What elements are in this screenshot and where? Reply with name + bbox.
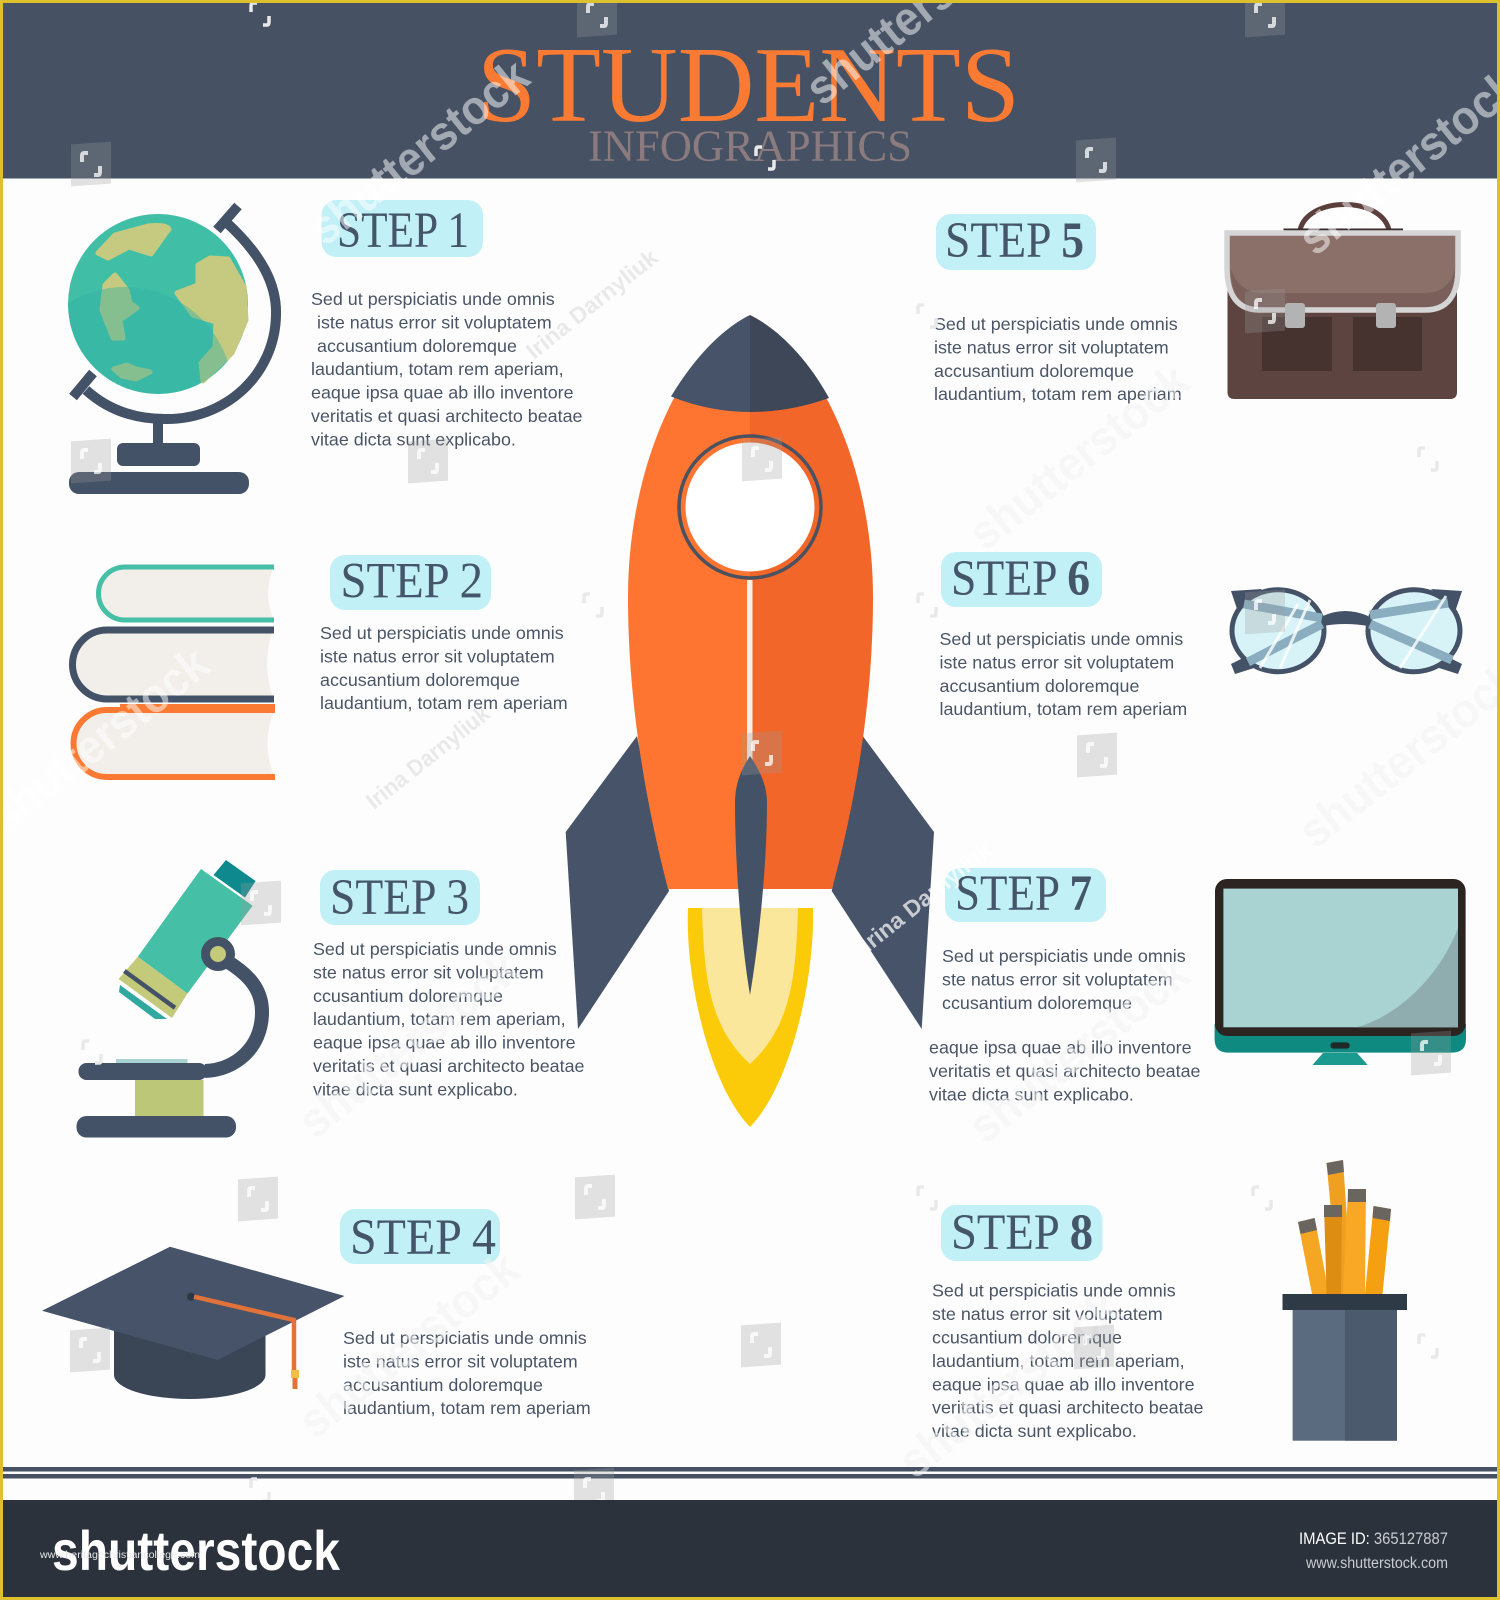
step 3 text: laudantium, totam rem aperiam, bbox=[313, 1009, 566, 1029]
title: INFOGRAPHICS bbox=[588, 122, 912, 170]
step 7 text: eaque ipsa quae ab illo inventore bbox=[929, 1038, 1192, 1058]
step 8 text: ste natus error sit voluptatem bbox=[932, 1304, 1163, 1324]
step 7 text: vitae dicta sunt explicabo. bbox=[929, 1084, 1134, 1104]
step 3 text: veritatis et quasi architecto beatae bbox=[313, 1056, 585, 1076]
footer image id: www.shutterstock.com bbox=[1305, 1555, 1448, 1572]
step 1 badge: STEP 1 bbox=[337, 203, 469, 259]
step 8 text: Sed ut perspiciatis unde omnis bbox=[932, 1281, 1176, 1301]
step 7 text: ste natus error sit voluptatem bbox=[942, 969, 1173, 989]
step 1 text: eaque ipsa quae ab illo inventore bbox=[311, 383, 574, 403]
icon: monitor bbox=[1215, 879, 1466, 1065]
footer image id: IMAGE ID: 365127887 bbox=[1299, 1529, 1448, 1548]
icon: briefcase bbox=[1227, 204, 1458, 399]
step 7 badge: STEP 7 bbox=[955, 866, 1092, 922]
step 4 text: laudantium, totam rem aperiam bbox=[343, 1398, 591, 1418]
step 2 text bbox=[320, 623, 568, 713]
watermarks: shutterstock bbox=[959, 947, 1199, 1154]
step 5 text: laudantium, totam rem aperiam bbox=[934, 384, 1182, 404]
step 8 text: laudantium, totam rem aperiam, bbox=[932, 1351, 1185, 1371]
step 7 text bbox=[929, 946, 1201, 1104]
step 2 text: laudantium, totam rem aperiam bbox=[320, 693, 568, 713]
step 8 text: ccusantium doloremque bbox=[932, 1328, 1122, 1348]
step 5 text: iste natus error sit voluptatem bbox=[934, 337, 1169, 357]
watermarks: Irina Darnyliuk bbox=[521, 244, 662, 364]
step 2 badge: STEP 2 bbox=[340, 554, 483, 610]
step 8 text: vitae dicta sunt explicabo. bbox=[932, 1421, 1137, 1441]
step 7 text: Sed ut perspiciatis unde omnis bbox=[942, 946, 1186, 966]
step 1 text: vitae dicta sunt explicabo. bbox=[311, 429, 516, 449]
step 8 badge: STEP 8 bbox=[951, 1205, 1093, 1261]
step 2 text: Sed ut perspiciatis unde omnis bbox=[320, 623, 564, 643]
step 4 text: iste natus error sit voluptatem bbox=[343, 1351, 578, 1371]
step 7 text: veritatis et quasi architecto beatae bbox=[929, 1061, 1201, 1081]
watermarks: shutterstock bbox=[289, 942, 529, 1149]
step 3 text bbox=[313, 939, 585, 1099]
step 3 text: Sed ut perspiciatis unde omnis bbox=[313, 939, 557, 959]
watermarks: shutterstock bbox=[959, 354, 1199, 561]
step 4 badge: STEP 4 bbox=[350, 1210, 496, 1266]
watermarks: shutterstock bbox=[289, 1242, 529, 1449]
watermarks: shutterstock bbox=[889, 1282, 1129, 1489]
watermarks: Irina Darnyliuk bbox=[855, 837, 996, 957]
step 7 text: ccusantium doloremque bbox=[942, 993, 1132, 1013]
step 3 text: ste natus error sit voluptatem bbox=[313, 962, 544, 982]
footer small url: www.heritagechristiancollege.com bbox=[39, 1550, 200, 1561]
step 1 text: veritatis et quasi architecto beatae bbox=[311, 406, 583, 426]
step 1 text bbox=[311, 289, 583, 449]
footer rule lines bbox=[0, 1467, 1500, 1478]
icon: globe bbox=[68, 202, 282, 494]
step 6 text bbox=[940, 629, 1187, 719]
icon: pencil cup bbox=[1282, 1160, 1407, 1441]
step 6 badge: STEP 6 bbox=[951, 551, 1090, 607]
icon: rocket bbox=[566, 315, 934, 1127]
step 5 badge: STEP 5 bbox=[945, 213, 1084, 269]
step 1 text: iste natus error sit voluptatem bbox=[317, 312, 552, 332]
icon: microscope bbox=[76, 860, 262, 1138]
step 6 text: laudantium, totam rem aperiam bbox=[940, 699, 1187, 719]
step 5 text: accusantium doloremque bbox=[934, 361, 1134, 381]
step 1 text: Sed ut perspiciatis unde omnis bbox=[311, 289, 555, 309]
step 3 text: ccusantium doloremque bbox=[313, 986, 503, 1006]
shutterstock logo: shutterstock bbox=[52, 1519, 341, 1582]
step 1 text: accusantium doloremque bbox=[317, 336, 517, 356]
footer image id bbox=[1299, 1529, 1448, 1572]
watermarks: shutterstock bbox=[299, 49, 539, 256]
step 2 text: iste natus error sit voluptatem bbox=[320, 646, 555, 666]
step 8 text: veritatis et quasi architecto beatae bbox=[932, 1398, 1204, 1418]
step 3 badge: STEP 3 bbox=[330, 870, 469, 926]
step 4 text bbox=[343, 1328, 591, 1418]
step 6 text: iste natus error sit voluptatem bbox=[940, 652, 1174, 672]
step 1 text: laudantium, totam rem aperiam, bbox=[311, 359, 564, 379]
step 6 text: Sed ut perspiciatis unde omnis bbox=[940, 629, 1183, 649]
footer bar bbox=[0, 1500, 1500, 1600]
step 6 text: accusantium doloremque bbox=[940, 676, 1139, 696]
step 4 text: accusantium doloremque bbox=[343, 1375, 543, 1395]
step 8 text bbox=[932, 1281, 1204, 1441]
step 5 text: Sed ut perspiciatis unde omnis bbox=[934, 314, 1178, 334]
step 3 text: vitae dicta sunt explicabo. bbox=[313, 1079, 518, 1099]
icon: books bbox=[72, 567, 275, 778]
step 3 text: eaque ipsa quae ab illo inventore bbox=[313, 1033, 576, 1053]
watermarks: Irina Darnyliuk bbox=[361, 700, 495, 814]
icon: glasses bbox=[1231, 589, 1462, 674]
title: STUDENTS bbox=[477, 26, 1020, 145]
step 5 text bbox=[934, 314, 1182, 404]
step 4 text: Sed ut perspiciatis unde omnis bbox=[343, 1328, 587, 1348]
icon: graduation cap bbox=[42, 1247, 344, 1399]
header band bbox=[0, 0, 1500, 178]
step 2 text: accusantium doloremque bbox=[320, 670, 520, 690]
step 8 text: eaque ipsa quae ab illo inventore bbox=[932, 1374, 1195, 1394]
